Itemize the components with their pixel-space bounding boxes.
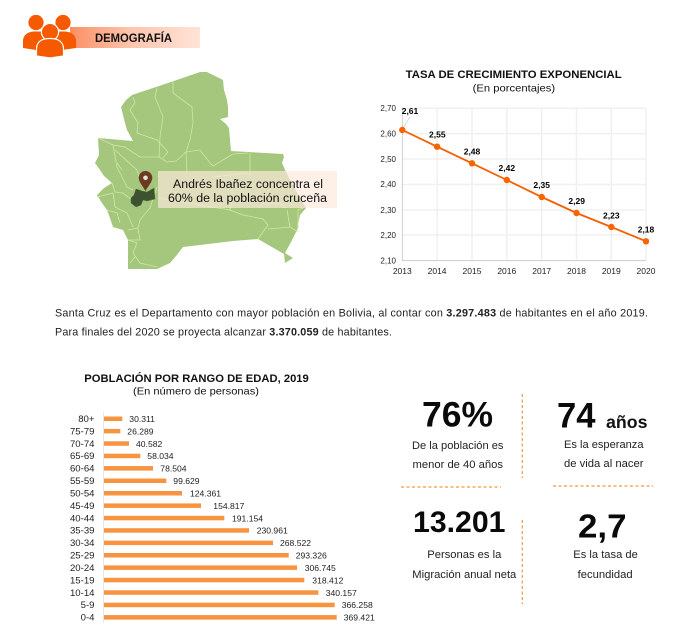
data labels: 2,48 — [464, 146, 481, 156]
x axis labels — [393, 266, 656, 276]
x axis labels: 2014 — [428, 266, 447, 276]
callout — [158, 171, 337, 208]
line chart: tasa de crecimiento exponencial — [380, 69, 656, 276]
icon: group of people — [23, 15, 76, 58]
value labels: 230.961 — [257, 526, 288, 536]
value labels: 340.157 — [326, 588, 357, 598]
chart subtitle: (En número de personas) — [133, 386, 259, 398]
y axis labels: 2,10 — [380, 256, 397, 266]
chart subtitle: (En porcentajes) — [473, 83, 555, 95]
age labels: 35-39 — [70, 526, 94, 537]
value labels — [127, 414, 375, 623]
Andrés Ibáñez highlighted area — [131, 188, 155, 207]
age labels: 75-79 — [70, 426, 94, 437]
stat: 76%: De la población es — [412, 440, 504, 452]
y axis labels — [380, 104, 397, 266]
stat: 74 años: de vida al nacer — [564, 458, 644, 470]
data labels: 2,55 — [429, 130, 446, 140]
stat: 76%: 76% — [422, 396, 493, 435]
age labels: 15-19 — [70, 575, 94, 586]
stat: 13.201: Migración anual neta — [412, 569, 517, 581]
age labels: 70-74 — [70, 439, 95, 450]
data labels: 2,42 — [499, 163, 515, 173]
age labels: 40-44 — [70, 513, 95, 524]
text block: Santa Cruz: Santa Cruz es el Departamento con mayor población en Bolivia, al contar con 3.297.483 de habitantes en el año 2019. — [55, 308, 648, 320]
y axis labels: 2,20 — [380, 231, 397, 240]
value labels: 366.258 — [342, 600, 373, 610]
stat: 2,7: Es la tasa de — [573, 549, 638, 561]
stat: 13.201 — [412, 506, 517, 581]
age labels: 55-59 — [70, 476, 94, 487]
value labels: 268.522 — [280, 538, 311, 548]
age labels: 30-34 — [70, 538, 95, 549]
age labels: 5-9 — [81, 600, 94, 611]
y axis labels: 2,60 — [380, 130, 397, 138]
stat: 74 años: Es la esperanza — [564, 439, 644, 451]
age labels: 10-14 — [70, 588, 95, 599]
stat: 76%: menor de 40 años — [412, 459, 504, 471]
value labels: 369.421 — [344, 613, 375, 623]
data labels: 2,35 — [533, 180, 550, 190]
value labels: 40.582 — [136, 439, 163, 449]
y axis labels: 2,50 — [380, 155, 397, 164]
value labels: 306.745 — [305, 563, 336, 573]
value labels: 191.154 — [232, 513, 263, 523]
heading: DEMOGRAFÍA — [95, 32, 172, 45]
value labels: 99.629 — [173, 476, 200, 486]
data labels — [402, 106, 655, 234]
callout: Andrés Ibañez concentra el — [173, 179, 323, 191]
age labels — [70, 414, 95, 624]
callout: 60% de la población cruceña — [168, 193, 328, 205]
text block: Santa Cruz — [55, 308, 648, 338]
header: demografía — [23, 15, 200, 58]
value labels: 58.034 — [147, 451, 174, 461]
age labels: 20-24 — [70, 563, 95, 574]
x axis labels: 2017 — [532, 266, 551, 276]
stat: 74 años — [557, 397, 648, 470]
value labels: 154.817 — [213, 501, 245, 511]
data labels: 2,23 — [603, 210, 620, 220]
y axis labels: 2,70 — [380, 104, 397, 113]
bars — [104, 416, 337, 620]
x axis labels: 2013 — [393, 266, 412, 276]
chart title: POBLACIÓN POR RANGO DE EDAD, 2019 — [84, 372, 309, 385]
header band — [70, 27, 200, 48]
age labels: 65-69 — [70, 451, 94, 462]
value labels: 26.289 — [127, 426, 154, 436]
stat: 13.201: Personas es la — [427, 549, 502, 561]
age labels: 25-29 — [70, 550, 94, 562]
value labels: 293.326 — [296, 550, 327, 560]
age labels: 80+ — [78, 414, 95, 425]
value labels: 124.361 — [190, 488, 221, 498]
x axis labels: 2020 — [637, 266, 656, 276]
y axis labels: 2,30 — [380, 206, 397, 215]
map shape — [95, 72, 306, 269]
text block: Santa Cruz: Para finales del 2020 se proyecta alcanzar 3.370.059 de habitantes. — [55, 326, 392, 338]
x axis labels: 2015 — [463, 266, 482, 276]
data labels: 2,61 — [402, 106, 419, 116]
value labels: 318.412 — [312, 575, 344, 585]
data labels: 2,29 — [568, 196, 585, 206]
age labels: 0-4 — [81, 613, 95, 624]
age labels: 50-54 — [70, 488, 95, 500]
x axis labels: 2016 — [497, 266, 517, 276]
age labels: 45-49 — [70, 501, 94, 512]
stat: 13.201: 13.201 — [413, 506, 506, 539]
stat: 74 años: años — [606, 412, 648, 432]
stat: 2,7 — [573, 508, 638, 581]
x axis labels: 2019 — [602, 266, 621, 276]
stat: 76% — [412, 396, 504, 471]
key figures — [401, 394, 653, 604]
bar chart: población por rango de edad — [70, 372, 375, 624]
y axis labels: 2,40 — [380, 180, 397, 189]
stat: 2,7: 2,7 — [578, 508, 626, 544]
stat: 2,7: fecundidad — [578, 569, 633, 581]
x axis labels: 2018 — [567, 266, 586, 276]
data labels: 2,18 — [638, 224, 655, 234]
chart title: TASA DE CRECIMIENTO EXPONENCIAL — [406, 69, 622, 81]
icon: map pin — [139, 171, 152, 191]
value labels: 78.504 — [160, 464, 187, 474]
stat: 74 años: 74 — [557, 397, 596, 436]
data line — [399, 117, 649, 244]
value labels: 30.311 — [129, 414, 155, 424]
age labels: 60-64 — [70, 464, 95, 475]
map district borders — [97, 82, 303, 267]
map of Santa Cruz — [95, 72, 337, 269]
